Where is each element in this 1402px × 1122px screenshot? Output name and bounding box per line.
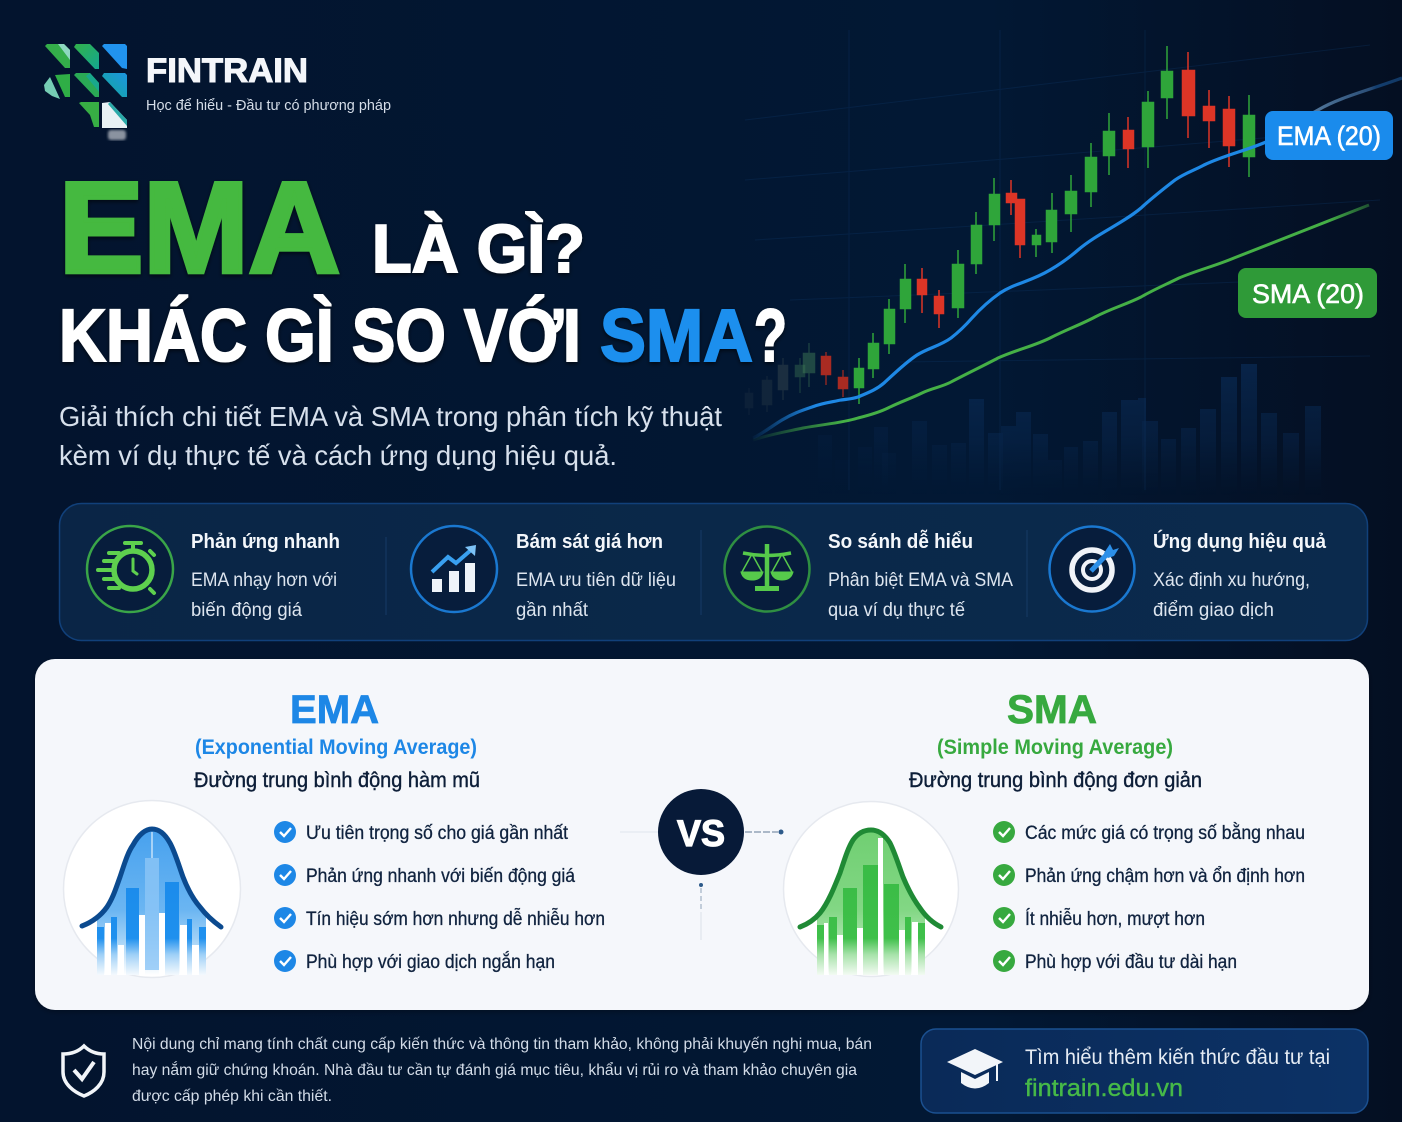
feature: Bám sát giá hơn [411,526,676,621]
title: LÀ GÌ? [372,211,585,287]
list: SMA points: Phù hợp với đầu tư dài hạn [1025,952,1237,973]
disclaimer text: hay nắm giữ chứng khoán. Nhà đầu tư cần tự đánh giá mục tiêu, khẩu vị rủi ro và tham khảo chuyên gia [132,1060,857,1079]
subtitle [59,401,722,471]
connector dots [699,830,784,887]
title: KHÁC GÌ SO VỚI [59,294,581,377]
disclaimer text [132,1036,872,1105]
red candles [917,52,1235,328]
icon: rising chart [411,526,497,612]
icon: shield [63,1046,104,1096]
column: SMA heading [909,688,1202,792]
list: EMA points [274,821,605,973]
green candles [854,46,1255,404]
icon: balance scale [724,526,810,612]
text: điểm giao dịch [1153,600,1274,621]
text: qua ví dụ thực tế [828,600,965,621]
tagline: Học để hiểu - Đầu tư có phương pháp [146,97,391,114]
text: EMA nhạy hơn với [191,570,337,591]
text: Xác định xu hướng, [1153,570,1310,591]
list: SMA points: Các mức giá có trọng số bằng nhau [1025,822,1305,844]
subtitle: kèm ví dụ thực tế và cách ứng dụng hiệu quả. [59,440,617,471]
candlestick chart [745,46,1255,415]
column: EMA heading: (Exponential Moving Average) [195,736,477,759]
VS badge: VS [677,813,725,854]
column: EMA heading [194,688,480,792]
logo mark [44,44,127,140]
EMA line [753,78,1402,438]
VS badge [658,789,744,875]
feature: Ứng dụng hiệu quả [1050,526,1327,621]
SMA line [753,205,1369,440]
text [1153,529,1327,621]
list: EMA points: Phù hợp với giao dịch ngắn hạn [306,951,555,973]
text [828,529,1013,621]
column: SMA heading: SMA [1007,688,1097,732]
badge: SMA (20): SMA (20) [1252,279,1364,309]
text: So sánh dễ hiểu [828,529,973,553]
title [59,156,787,377]
text [516,531,676,621]
column: EMA heading: EMA [290,688,379,732]
faded candles [745,343,815,415]
icon: target [1050,526,1134,612]
panel: features [60,504,1368,640]
CTA text: fintrain.edu.vn [1025,1075,1183,1102]
list: EMA points: Phản ứng nhanh với biến động giá [306,866,575,887]
text [191,531,340,621]
list: SMA points [993,821,1305,973]
CTA text: Tìm hiểu thêm kiến thức đầu tư tại [1025,1046,1330,1069]
column: SMA heading: (Simple Moving Average) [937,736,1173,759]
call to action box [921,1029,1368,1113]
text: gần nhất [516,600,589,621]
text: EMA ưu tiên dữ liệu [516,570,676,591]
CTA text [1025,1046,1330,1102]
badge: EMA (20): EMA (20) [1277,121,1381,151]
feature: Phản ứng nhanh [87,526,340,621]
illustration: EMA bell curve [64,800,240,978]
column: SMA heading: Đường trung bình động đơn giản [909,769,1202,792]
badge: EMA (20) [1265,111,1393,160]
illustration: SMA bell curve [784,802,958,976]
text: biến động giá [191,600,302,621]
text: Bám sát giá hơn [516,531,663,553]
connector lines [620,832,778,940]
disclaimer text: Nội dung chỉ mang tính chất cung cấp kiến thức và thông tin tham khảo, không phải khuyến nghị mua, bán [132,1036,872,1053]
title: ? [754,294,787,377]
panel: comparison [35,659,1369,1010]
badge: SMA (20) [1238,268,1377,318]
list: EMA points: Ưu tiên trọng số cho giá gần nhất [306,823,569,844]
icon: graduation cap [947,1049,1003,1088]
icon: stopwatch [87,526,173,612]
column: EMA heading: Đường trung bình động hàm mũ [194,769,480,792]
list: SMA points: Ít nhiễu hơn, mượt hơn [1025,908,1205,930]
list: EMA points: Tín hiệu sớm hơn nhưng dễ nhiễu hơn [306,908,605,930]
brand name: FINTRAIN [146,52,308,90]
volume bars [818,364,1321,495]
disclaimer text: được cấp phép khi cần thiết. [132,1088,332,1105]
text: Phân biệt EMA và SMA [828,570,1013,591]
title: EMA [59,156,340,300]
text: Ứng dụng hiệu quả [1153,529,1327,553]
feature: So sánh dễ hiểu [724,526,1013,621]
logo: FINTRAIN [44,44,391,140]
subtitle: Giải thích chi tiết EMA và SMA trong phân tích kỹ thuật [59,401,722,432]
text: Phản ứng nhanh [191,531,340,553]
chart background grid [745,30,1380,490]
list: SMA points: Phản ứng chậm hơn và ổn định hơn [1025,866,1305,887]
title: SMA [600,294,753,377]
